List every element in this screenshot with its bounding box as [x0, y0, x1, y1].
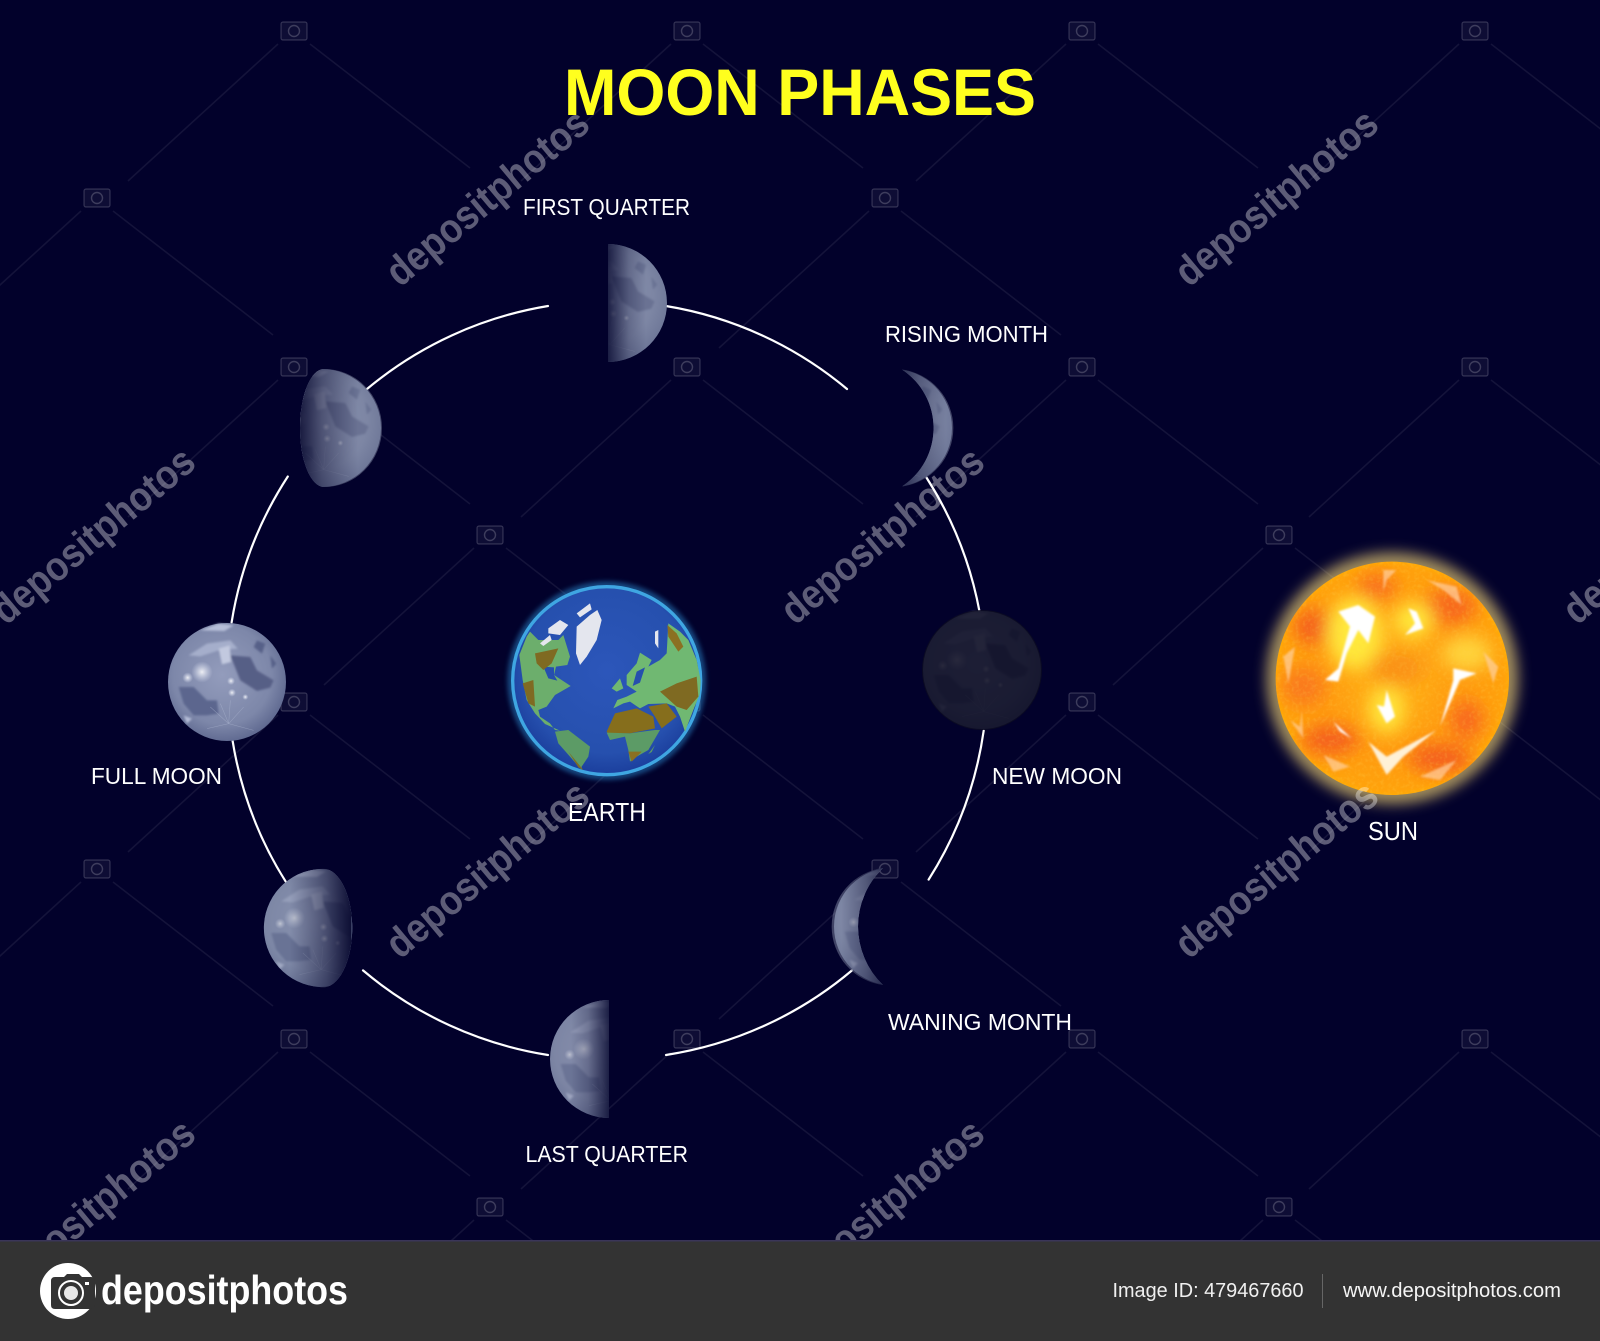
moon: new moon — [922, 610, 1042, 730]
phase labels — [91, 194, 1418, 1167]
label: earth: EARTH — [568, 797, 646, 827]
website url: www.depositphotos.com — [1342, 1280, 1561, 1302]
label: full moon: FULL MOON — [91, 763, 222, 789]
moon: first quarter — [608, 244, 667, 362]
title: MOON PHASES — [564, 55, 1036, 129]
label: first quarter: FIRST QUARTER — [523, 194, 690, 220]
label: last quarter: LAST QUARTER — [526, 1141, 688, 1167]
moon: waxing gibbous — [300, 369, 382, 487]
watermark text: depositphotos — [376, 772, 598, 967]
watermark text: depositphotos — [771, 1110, 993, 1305]
earth — [507, 581, 706, 780]
label: waning month: WANING MONTH — [888, 1009, 1072, 1035]
label: rising month: RISING MONTH — [885, 321, 1048, 347]
footer bar — [0, 1240, 1600, 1341]
watermark text: depositphotos — [771, 438, 993, 633]
orbit ring — [232, 306, 984, 1055]
label: sun: SUN — [1368, 816, 1418, 846]
watermark text: depositphotos — [376, 100, 598, 295]
moon: last quarter — [550, 1000, 609, 1118]
image id: Image ID: 479467660 — [1112, 1280, 1304, 1302]
moon: waning month crescent — [832, 868, 883, 985]
moon: rising month crescent — [902, 370, 954, 486]
watermark text: depositphotos — [1165, 100, 1387, 295]
footer logo icon — [40, 1263, 96, 1319]
moon: full moon — [168, 623, 286, 741]
label: new moon: NEW MOON — [992, 763, 1122, 789]
watermark text: depositphotos — [1165, 772, 1387, 967]
footer logo wordmark: depositphotos — [101, 1267, 348, 1313]
moon: waning gibbous — [264, 868, 352, 988]
sun — [1266, 552, 1518, 804]
